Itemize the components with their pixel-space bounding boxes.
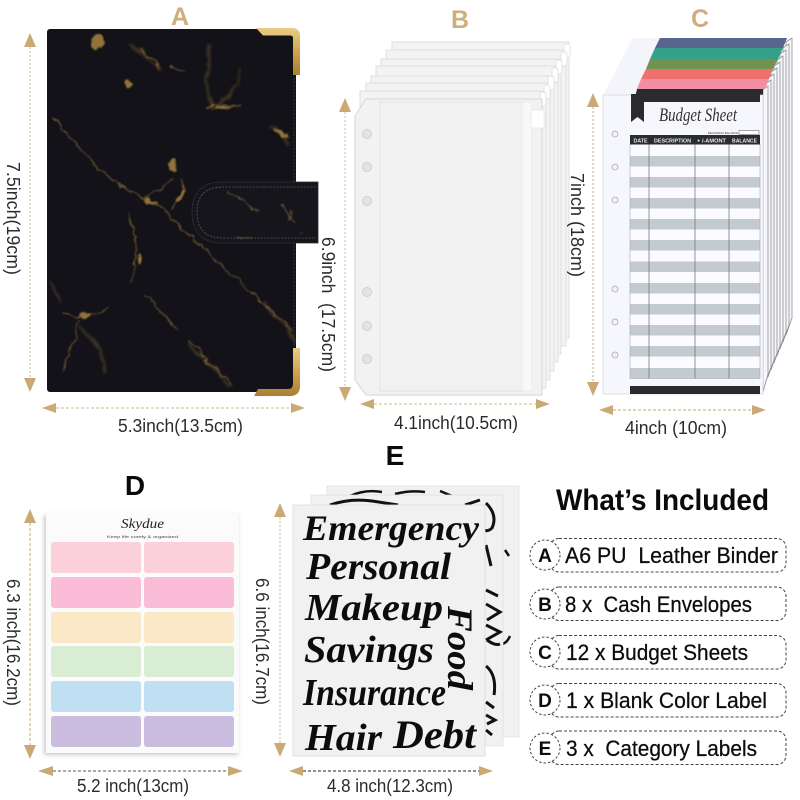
- panel A: leather binder: [3, 3, 318, 436]
- script label words: Emergency: [302, 508, 480, 548]
- item E: 3 x Category Labels: [566, 736, 757, 761]
- item E: [530, 731, 786, 764]
- budget table: BALANCE: [732, 138, 757, 144]
- dimension arrow: height: [274, 503, 286, 757]
- script label words: [302, 508, 480, 759]
- item C: C: [538, 643, 552, 664]
- dimension arrow: width: [599, 405, 766, 415]
- heading: What’s Included: [556, 484, 769, 517]
- panel E: category labels: [252, 440, 519, 796]
- color labels: [51, 542, 234, 747]
- item B: [530, 587, 786, 620]
- colored sheet headers: [634, 38, 787, 102]
- item C: 12 x Budget Sheets: [566, 640, 748, 665]
- dimension label: height: 7.5inch(19cm): [3, 162, 24, 275]
- black ribbon header: [631, 94, 760, 122]
- spine stitching: [293, 78, 295, 346]
- gold top-right corner: [256, 28, 300, 75]
- script label words: Makeup: [304, 587, 443, 629]
- dimension label: width: 4.1inch(10.5cm): [394, 412, 518, 433]
- script label words: Food: [440, 605, 480, 691]
- dimension label: height: 6.6 inch(16.7cm): [252, 578, 273, 705]
- sheet holes: [612, 131, 618, 358]
- dimension arrow: width: [38, 766, 243, 776]
- heading: A: A: [171, 3, 189, 31]
- panel D: blank color labels: [3, 470, 243, 796]
- item D: [530, 684, 786, 717]
- dimension arrow: height: [24, 509, 36, 759]
- item D: 1 x Blank Color Label: [566, 688, 767, 713]
- item B: B: [538, 595, 552, 616]
- dimension label: height: 6.3 inch(16.2cm): [3, 579, 24, 706]
- script label words: Savings: [304, 629, 434, 671]
- script label words: Hair: [304, 717, 383, 759]
- dimension arrow: width: [42, 403, 305, 413]
- dimension label: width: 4inch (10cm): [625, 417, 727, 438]
- front label sheet: [293, 505, 485, 756]
- item D: D: [538, 691, 552, 712]
- stacked sheet edges: [633, 38, 792, 392]
- envelope pocket: [380, 102, 530, 391]
- dimension label: height: 7inch (18cm): [567, 173, 588, 277]
- dimension arrow: width: [360, 399, 550, 409]
- budget table: DATE: [634, 138, 648, 144]
- budget table: + /-AMONT: [697, 138, 727, 144]
- back label sheet: [327, 486, 519, 737]
- dimension arrow: height: [339, 98, 351, 401]
- stacked back envelopes: [360, 42, 570, 388]
- label sheet: [46, 512, 239, 753]
- binder holes: [362, 130, 372, 364]
- label sheet shadow: [44, 515, 238, 755]
- item B: 8 x Cash Envelopes: [565, 592, 752, 617]
- item C: [530, 636, 786, 669]
- back sheet margins: [603, 38, 662, 95]
- tagline: Keep life comfy & organized: [107, 534, 178, 539]
- dimension label: width: 5.2 inch(13cm): [77, 775, 189, 796]
- middle label sheet: [311, 495, 503, 746]
- heading: B: B: [451, 6, 469, 34]
- beginning balance: [708, 130, 759, 135]
- panel B: cash envelopes: [318, 6, 570, 433]
- zipper pull: [531, 110, 544, 128]
- panel C: budget sheets: [567, 5, 792, 438]
- panel: what's included: [530, 484, 786, 764]
- marble veins: [50, 34, 296, 385]
- binder cover: [47, 29, 296, 392]
- item A: A6 PU Leather Binder: [565, 543, 778, 568]
- front envelope: [355, 99, 542, 395]
- beginning balance: BEGINNING BALANCE: [708, 132, 738, 135]
- script label words: Personal: [305, 546, 451, 588]
- heading: D: D: [125, 470, 145, 501]
- dimension label: height: 6.9inch (17.5cm): [318, 237, 339, 372]
- bottom bar: [630, 386, 760, 394]
- dimension label: width: 4.8 inch(12.3cm): [327, 775, 453, 796]
- budget table: DESCRIPTION: [654, 138, 691, 144]
- sheet title: Budget Sheet: [659, 105, 738, 126]
- script label words: Debt: [392, 712, 478, 757]
- snap strap: [192, 182, 318, 243]
- zipper strip: [522, 102, 532, 391]
- brand: Skydue: [121, 517, 164, 532]
- front sheet: [603, 95, 763, 394]
- item A: A: [538, 546, 552, 567]
- item E: E: [539, 739, 551, 760]
- dimension arrow: height: [587, 93, 599, 396]
- dimension arrow: height: [24, 33, 36, 392]
- heading: C: C: [691, 5, 709, 33]
- heading: E: E: [386, 440, 404, 471]
- budget table: [630, 135, 760, 379]
- item A: [530, 538, 786, 572]
- script label words: Insurance: [302, 672, 446, 714]
- gold bottom-right corner: [254, 348, 300, 396]
- dimension arrow: width: [289, 766, 493, 776]
- dimension label: width: 5.3inch(13.5cm): [118, 415, 243, 436]
